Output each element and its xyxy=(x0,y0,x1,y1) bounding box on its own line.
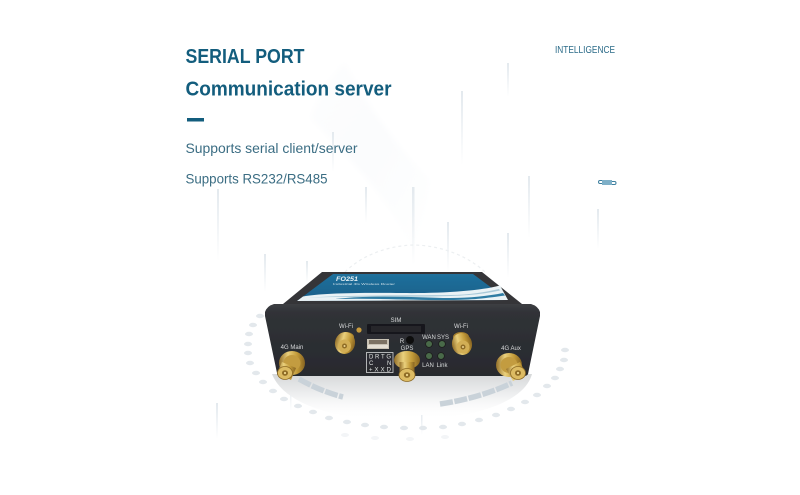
port labels: Link xyxy=(436,363,448,369)
feature text 1: Supports serial client/server xyxy=(186,140,358,156)
terminal pin label box: N xyxy=(387,361,391,367)
device screen xyxy=(297,274,508,301)
screen sub label: Industrial 4G Wireless Router xyxy=(333,282,395,286)
title line 1: SERIAL PORT xyxy=(186,46,304,68)
terminal pin label box: DRTG xyxy=(369,354,391,360)
title line 2: Communication server xyxy=(186,78,392,100)
screen model label: FO251 xyxy=(336,276,358,283)
device lid xyxy=(283,272,522,304)
device front panel xyxy=(265,304,540,376)
port labels: SYS xyxy=(437,335,449,341)
antenna: gps xyxy=(394,351,420,382)
background swoosh xyxy=(310,62,430,250)
grey arc segments xyxy=(299,379,512,404)
port labels: GPS xyxy=(401,346,413,352)
terminal pin label box: +XXD xyxy=(369,368,392,374)
antenna: wifi right xyxy=(449,331,475,357)
led indicators xyxy=(426,341,445,359)
intelligence label: INTELLIGENCE xyxy=(555,45,615,56)
antenna: 4g main xyxy=(277,351,305,380)
router device xyxy=(265,272,540,382)
background vertical lines xyxy=(216,63,599,439)
port labels: 4G Aux xyxy=(501,346,521,352)
serial connector xyxy=(367,339,389,349)
port labels xyxy=(281,324,521,369)
device shadow xyxy=(272,374,532,420)
antenna: wifi left xyxy=(332,330,358,356)
terminal pin label box xyxy=(366,352,393,374)
status led orange xyxy=(356,327,362,333)
sim slot xyxy=(367,318,425,334)
reset button xyxy=(400,336,414,345)
terminal pin label box: C xyxy=(369,361,374,367)
inner dashed ring xyxy=(345,245,485,272)
antenna: 4g aux xyxy=(496,353,526,381)
port labels: 4G Main xyxy=(281,345,303,351)
feature text 2: Supports RS232/RS485 xyxy=(186,170,328,186)
icon: small link glyph xyxy=(598,180,616,185)
port labels: Wi-Fi xyxy=(454,324,468,330)
title accent dash xyxy=(187,118,204,122)
port labels: WAN xyxy=(422,335,436,341)
reset button: R xyxy=(400,339,405,345)
port labels: Wi-Fi xyxy=(339,324,353,330)
sim slot: SIM xyxy=(391,318,401,324)
dotted ring xyxy=(244,314,569,430)
port labels: LAN xyxy=(422,363,434,369)
